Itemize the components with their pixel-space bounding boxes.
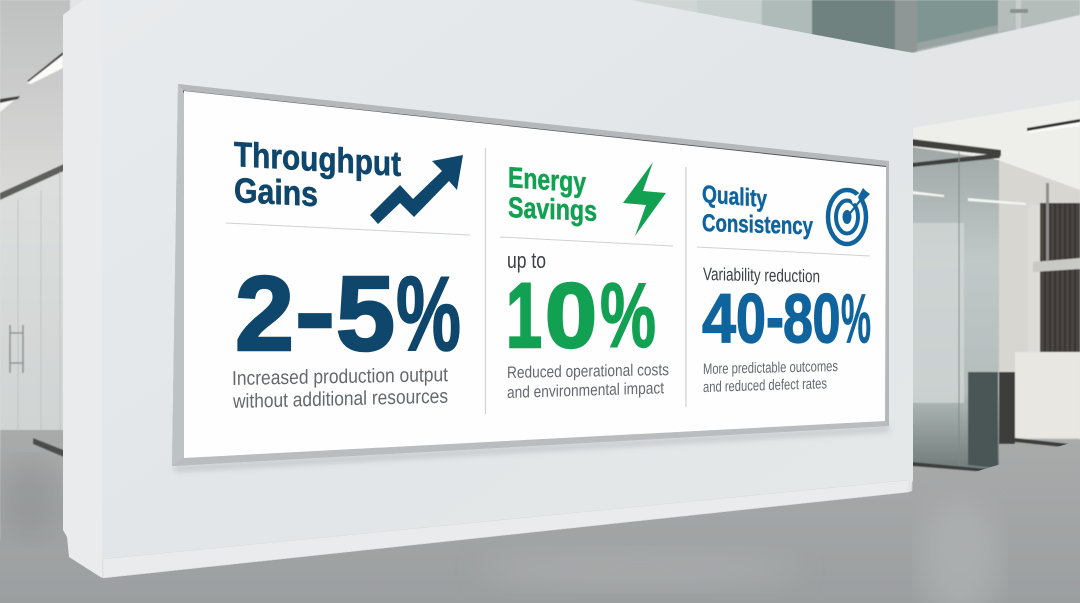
main wall bbox=[102, 0, 913, 578]
billboard white panel bbox=[184, 91, 886, 458]
description: quality bbox=[703, 358, 838, 396]
description: quality: More predictable outcomes bbox=[703, 358, 838, 378]
heading: energy savings bbox=[508, 162, 597, 228]
description: energy bbox=[507, 361, 669, 402]
stat: 2-5%: % bbox=[396, 255, 461, 373]
stat: 10% bbox=[506, 265, 656, 367]
description: energy: and environmental impact bbox=[507, 379, 664, 402]
column dividers bbox=[486, 148, 686, 414]
description: quality: and reduced defect rates bbox=[703, 375, 827, 396]
stat: 2-5% bbox=[235, 253, 461, 373]
divider bbox=[500, 237, 673, 246]
stat: 2-5%: 5 bbox=[336, 255, 395, 373]
heading: quality consistency: Consistency bbox=[702, 210, 813, 240]
stat: 40-80%: 0 bbox=[812, 280, 840, 358]
stat: 40-80%: 4 bbox=[702, 280, 736, 358]
divider bbox=[697, 247, 870, 256]
stat: 40-80%: - bbox=[766, 278, 784, 356]
stat: 40-80%: 8 bbox=[783, 280, 813, 358]
stat: 10%: % bbox=[600, 265, 656, 367]
divider bbox=[226, 223, 470, 235]
heading: energy savings: Savings bbox=[508, 192, 597, 228]
heading: quality consistency: Quality bbox=[702, 181, 767, 213]
panel: throughput gains bbox=[226, 135, 470, 413]
heading: throughput gains bbox=[234, 135, 401, 214]
panel: quality consistency bbox=[697, 181, 871, 396]
heading: quality consistency bbox=[702, 181, 813, 240]
panel: energy savings bbox=[500, 162, 673, 402]
heading: throughput gains: Throughput bbox=[234, 135, 401, 184]
billboard frame bbox=[172, 84, 889, 466]
stat: 40-80% bbox=[702, 278, 871, 358]
background: polished concrete floor bbox=[0, 440, 1080, 603]
heading: throughput gains: Gains bbox=[234, 171, 318, 214]
left pillar face bbox=[63, 0, 102, 578]
wall baseboard bbox=[103, 480, 909, 578]
description: throughput: without additional resources bbox=[232, 386, 448, 413]
billboard: % bbox=[841, 280, 871, 358]
label: up to: up to bbox=[507, 248, 546, 273]
description: throughput bbox=[232, 364, 448, 413]
stat: 10%: 0 bbox=[545, 265, 597, 367]
stat: 40-80%: 0 bbox=[736, 280, 766, 358]
heading: energy savings: Energy bbox=[508, 162, 586, 199]
billboard shadow bbox=[172, 426, 889, 472]
stat: 2-5%: - bbox=[295, 253, 335, 371]
icon: target with arrow bbox=[828, 187, 870, 244]
description: energy: Reduced operational costs bbox=[507, 361, 669, 382]
label: variability reduction: Variability reduction bbox=[703, 264, 820, 286]
stat: 10%: 1 bbox=[506, 265, 542, 367]
description: throughput: Increased production output bbox=[232, 364, 448, 390]
icon: rising arrow bbox=[370, 155, 463, 224]
billboard bbox=[172, 84, 889, 466]
stat: 2-5%: 2 bbox=[235, 255, 294, 373]
icon: lightning bolt bbox=[623, 162, 666, 236]
